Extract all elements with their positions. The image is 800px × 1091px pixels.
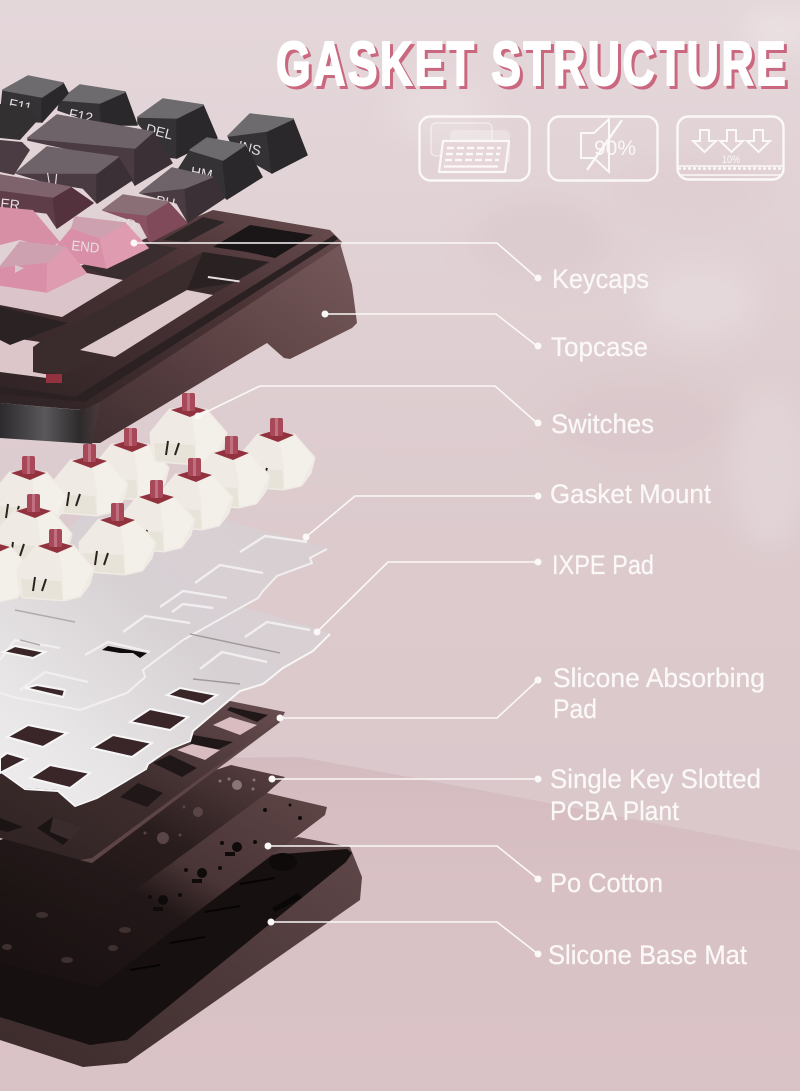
keycap DEL: DEL: [144, 120, 175, 143]
label: Topcase: [322, 310, 648, 362]
label: Single Key Slotted PCBA Plant: PCBA Plant: [550, 796, 679, 826]
label: Slicone Base Mat: Slicone Base Mat: [548, 940, 747, 970]
label: Po Cotton: Po Cotton: [550, 868, 663, 898]
keycaps: [0, 76, 307, 292]
topcase side body: [85, 243, 357, 443]
icon: keyboard layers: [420, 116, 530, 180]
keycap HM: HM: [189, 163, 214, 183]
topcase: [0, 210, 357, 444]
label: Slicone Base Mat: [268, 918, 747, 970]
keycap PD: [103, 195, 187, 242]
label: IXPE Pad: IXPE Pad: [552, 550, 654, 580]
plate edge highlights: [0, 549, 327, 710]
keycap backslash: [16, 147, 132, 203]
plate slots: [0, 536, 310, 690]
label: Switches: Switches: [551, 409, 654, 439]
plate silhouette: [0, 500, 330, 805]
label: Keycaps: [130, 240, 649, 294]
po cotton: [0, 793, 327, 987]
keycap Enter: ER: [0, 195, 21, 213]
label: Single Key Slotted PCBA Plant: [268, 764, 761, 826]
keycap PD: PD: [116, 214, 137, 233]
IXPE and gasket plates: [0, 500, 330, 806]
icon: muted speaker 90%: 90%: [594, 137, 636, 160]
keycap DEL: [138, 99, 217, 158]
keycap row two left: [0, 104, 38, 140]
label: Switches: [194, 386, 654, 439]
keycap F12: F12: [67, 105, 95, 126]
keycap END: [58, 217, 148, 268]
switches: [0, 393, 314, 601]
keycap INS: [228, 114, 307, 173]
plate square holes: [0, 646, 217, 788]
keycap F11: F11: [7, 95, 33, 116]
keycap backslash: \ |: [46, 170, 59, 187]
label: Keycaps: Keycaps: [552, 264, 649, 294]
keycap pink rear: [0, 207, 60, 248]
icon: arrows pressing 10%: 10%: [722, 154, 740, 166]
topcase open windows: [0, 273, 123, 317]
keycap INS: INS: [236, 137, 263, 159]
label: Slicone Absorbing Pad: Slicone Absorbing: [553, 663, 765, 693]
label: Slicone Absorbing Pad: [276, 663, 765, 724]
keycap F11: [0, 76, 68, 122]
title: GASKET STRUCTURE: [276, 30, 786, 99]
keycap arrow: [0, 242, 86, 292]
keycap long bar: [28, 115, 172, 185]
keycap END: END: [71, 237, 100, 256]
keycap F12: [58, 85, 137, 126]
keycap Enter: [0, 175, 93, 228]
title: GASKET STRUCTURE: [279, 33, 789, 102]
topcase top rim: [0, 210, 343, 410]
label: Po Cotton: [264, 842, 663, 898]
silicone base mat: [0, 837, 362, 1067]
label: Slicone Absorbing Pad: Pad: [553, 694, 597, 724]
keycap PU: PU: [154, 192, 176, 211]
keycap PU: [140, 168, 224, 222]
PCBA plate: [0, 765, 285, 918]
topcase front corner: [0, 402, 100, 444]
icon: arrows pressing 10%: [678, 116, 784, 180]
label: Topcase: Topcase: [551, 332, 648, 362]
label: Gasket Mount: Gasket Mount: [550, 479, 711, 509]
icon: muted speaker 90%: [548, 116, 658, 180]
label: Single Key Slotted PCBA Plant: Single Key Slotted: [550, 764, 761, 794]
label: IXPE Pad: [314, 550, 654, 636]
keycap row three left: [0, 140, 30, 175]
keycap HM: [178, 138, 262, 199]
label: Gasket Mount: [302, 479, 711, 540]
silicone absorbing pad: [0, 700, 285, 863]
